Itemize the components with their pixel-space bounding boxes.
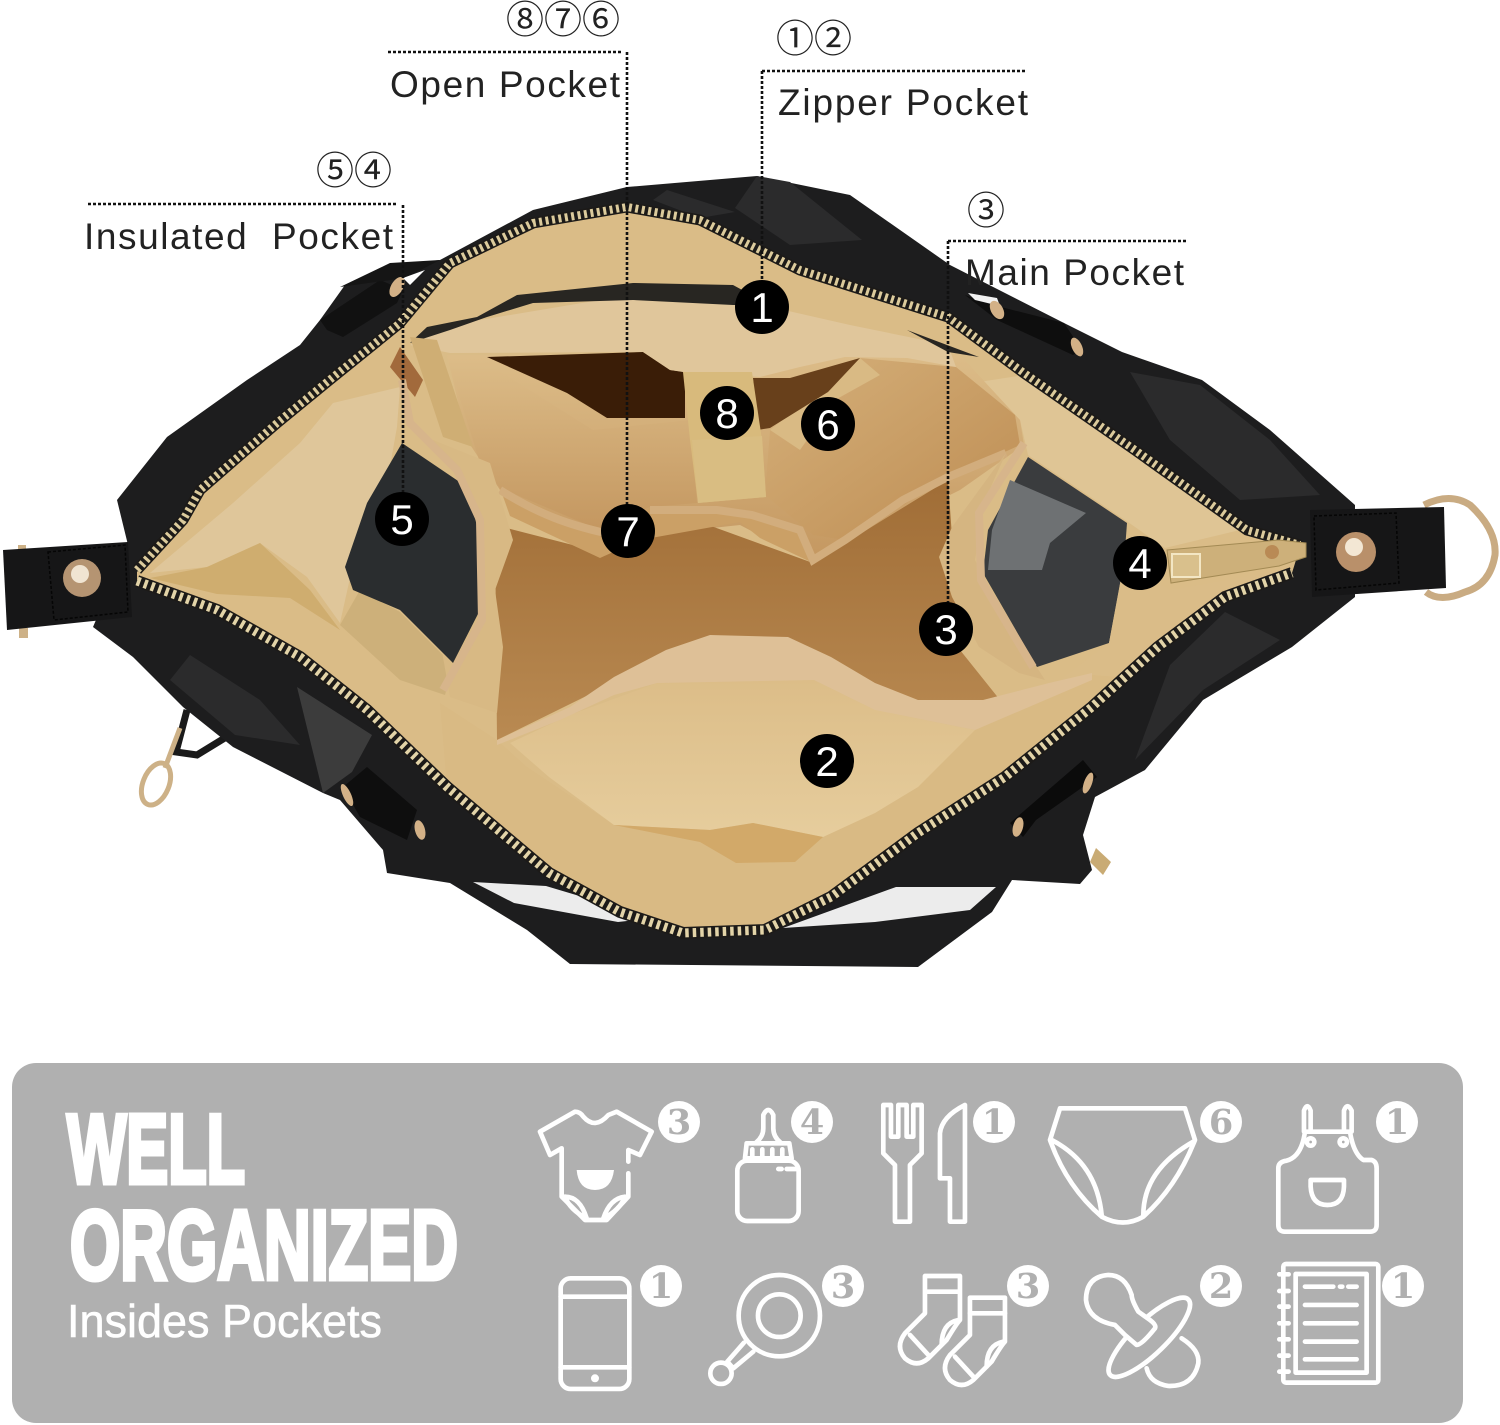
back panel of main compartment <box>447 355 1024 563</box>
insulated pocket right <box>983 457 1127 667</box>
icon: pacifier <box>1086 1275 1200 1387</box>
handle loop bottom right <box>1010 760 1111 875</box>
open pocket label: Open Pocket <box>390 64 621 105</box>
left lining lower fold <box>340 590 453 695</box>
top zipper teeth <box>137 207 1300 570</box>
top flap <box>653 176 862 245</box>
icon: cutlery <box>883 1105 965 1222</box>
main pocket leader <box>948 241 1188 605</box>
icon: diaper <box>1050 1108 1195 1222</box>
panel: well organized <box>12 1063 1463 1423</box>
zipper pocket numbers: ①② <box>776 8 852 63</box>
front pocket lip <box>440 675 1118 933</box>
marker 7 <box>601 504 655 558</box>
elastic pocket fronts <box>500 488 813 563</box>
left strap tab <box>3 542 132 630</box>
badge 1: 1 <box>1385 1102 1409 1143</box>
handle loop top right <box>965 293 1086 358</box>
badge 2 <box>1200 1265 1242 1307</box>
badge 1 <box>640 1265 682 1307</box>
badge 6 <box>1200 1101 1242 1143</box>
white gaps at strap <box>473 882 996 928</box>
elastic edge <box>500 453 1006 560</box>
insulated pocket right binding <box>979 443 1033 667</box>
front pocket inner <box>510 680 975 837</box>
icon: pan <box>710 1275 820 1384</box>
marker 6 <box>801 397 855 451</box>
badge 3 <box>658 1101 700 1143</box>
insulated pocket left puff <box>433 440 513 713</box>
brown back slot right <box>753 358 860 430</box>
zipper pull left <box>390 347 423 397</box>
badge 3 <box>1007 1265 1049 1307</box>
main pocket number: ③ <box>967 180 1005 235</box>
icon: socks <box>900 1276 1005 1385</box>
main pocket label: Main Pocket <box>965 252 1185 293</box>
marker 2: 2 <box>815 738 839 785</box>
badge 6: 6 <box>1209 1102 1233 1143</box>
marker 5 <box>375 492 429 546</box>
icon: bottle <box>737 1110 799 1221</box>
front pocket fold shade <box>614 823 823 863</box>
handle loop bottom left <box>338 767 427 841</box>
upper flap lining <box>410 295 956 377</box>
back panel right <box>765 358 1020 540</box>
marker 4: 4 <box>1128 540 1152 587</box>
lining <box>137 207 1300 933</box>
bag body leather <box>93 176 1355 967</box>
badge 1 <box>973 1101 1015 1143</box>
insulated pocket left binding <box>402 380 482 690</box>
insulated pocket numbers: ⑤④ <box>316 140 392 195</box>
badge 1 <box>1382 1265 1424 1307</box>
marker 2 <box>800 734 854 788</box>
open pocket leader <box>388 52 627 512</box>
badge 1: 1 <box>649 1266 673 1307</box>
badge 4 <box>791 1101 833 1143</box>
insulated pocket right puff <box>939 453 1045 680</box>
badge 3: 3 <box>831 1266 855 1307</box>
insulated pocket leader <box>88 204 403 497</box>
icon: notebook <box>1279 1264 1378 1383</box>
badge 1 <box>1376 1101 1418 1143</box>
marker 8 <box>700 386 754 440</box>
badge 1: 1 <box>982 1102 1006 1143</box>
insulated pocket label: Insulated Pocket <box>84 216 394 257</box>
insulated pocket left <box>345 443 480 663</box>
badge 1: 1 <box>1391 1266 1415 1307</box>
badge 2: 2 <box>1209 1266 1233 1307</box>
callout: zipper pocket <box>762 8 1029 285</box>
zipper slider <box>1167 540 1306 583</box>
grey leather patch <box>297 687 372 793</box>
badge 3: 3 <box>1016 1266 1040 1307</box>
marker 6: 6 <box>816 401 840 448</box>
bottom zipper teeth <box>137 573 1292 933</box>
marker 8: 8 <box>715 390 739 437</box>
subheading: Insides Pockets <box>67 1295 382 1347</box>
badge 3 <box>822 1265 864 1307</box>
reflective lining right <box>988 480 1086 570</box>
icon: apron <box>1278 1106 1377 1232</box>
zipper pocket label: Zipper Pocket <box>778 82 1029 123</box>
left lining shade <box>150 543 340 630</box>
marker 3 <box>919 602 973 656</box>
dark back slot <box>487 352 685 418</box>
left lining light flap <box>150 387 400 623</box>
marker 5: 5 <box>390 496 414 543</box>
marker 1: 1 <box>750 284 774 331</box>
right lining lower fold <box>1060 562 1285 705</box>
right lining upper fold <box>960 375 1240 548</box>
icon: bodysuit <box>540 1112 652 1220</box>
webbing strap left <box>410 337 473 447</box>
callout: open pocket <box>388 0 627 512</box>
tab studs <box>18 545 28 638</box>
zipper pocket leader <box>762 71 1027 285</box>
marker 3: 3 <box>934 606 958 653</box>
right strap tab <box>1310 507 1446 597</box>
marker 1 <box>735 280 789 334</box>
heading: organized: ORGANIZED <box>70 1190 458 1300</box>
marker 4 <box>1113 536 1167 590</box>
heading: well: WELL <box>67 1094 245 1204</box>
light fold back panel <box>447 357 697 530</box>
badge 4: 4 <box>800 1102 824 1143</box>
main cavity <box>495 480 1000 740</box>
handle loop top left <box>320 260 440 337</box>
icon: phone <box>561 1278 629 1389</box>
photo: open black diaper bag <box>3 176 1495 967</box>
zipper pocket opening <box>410 283 979 357</box>
callout: main pocket <box>948 180 1188 605</box>
numbered markers <box>375 280 1167 788</box>
D ring <box>1424 498 1495 598</box>
panel background <box>12 1063 1463 1423</box>
front pocket zip tape <box>497 635 1092 745</box>
leather highlights <box>170 372 1320 760</box>
badge 3: 3 <box>667 1102 691 1143</box>
webbing strap loop <box>683 372 766 503</box>
callout: insulated pocket <box>84 140 403 497</box>
marker 7: 7 <box>616 508 640 555</box>
carabiner hook <box>136 710 228 809</box>
light ribbon near marker 6 <box>770 358 880 450</box>
